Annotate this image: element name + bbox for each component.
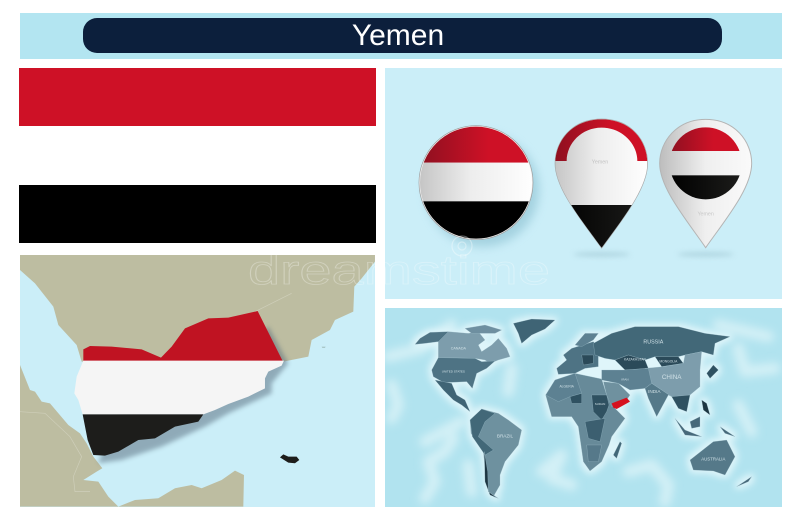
icon: flag pin marker: Yemen (592, 159, 608, 165)
icon: flag pin marker (553, 117, 650, 256)
Australia (690, 440, 735, 475)
North America (438, 332, 510, 363)
country labels (442, 339, 725, 462)
country labels: KAZAKHSTAN (624, 357, 647, 361)
continents (415, 319, 752, 498)
Yemen drop shadow (98, 327, 288, 463)
icon: location pin with flag disc (660, 119, 752, 256)
country labels: CHINA (662, 374, 682, 381)
Madagascar (613, 442, 622, 458)
panel: world map (385, 308, 782, 507)
country labels: RUSSIA (643, 339, 664, 345)
continent halo (415, 319, 752, 498)
country labels: MONGOLIA (659, 359, 678, 363)
New Zealand (737, 477, 752, 487)
Socotra island (280, 454, 299, 463)
ocean currents (388, 325, 775, 502)
Greenland (513, 319, 555, 343)
country labels: BRAZIL (497, 434, 514, 439)
country labels: INDIA (648, 389, 661, 394)
Yemen shape with flag (74, 311, 284, 456)
watermark (248, 235, 550, 293)
country labels: SUDAN (595, 402, 605, 406)
title pill: Yemen (352, 19, 444, 52)
country labels: CANADA (451, 346, 467, 350)
border lines (20, 293, 292, 492)
Africa (546, 373, 625, 471)
South America (470, 409, 522, 498)
title banner panel (20, 13, 782, 59)
Asia (593, 327, 730, 360)
Europe (557, 342, 598, 374)
watermark: dreamstime (248, 247, 550, 293)
title pill (83, 18, 722, 53)
Yemen highlighted (612, 398, 630, 409)
button shadow (426, 133, 539, 247)
country labels: UNITED STATES (442, 370, 465, 374)
country labels: ALGERIA (559, 385, 575, 389)
country labels: AUSTRALIA (701, 457, 725, 462)
country labels: IRAN (621, 377, 629, 381)
land masses (20, 255, 375, 507)
icon: location pin with flag disc: Yemen (697, 211, 714, 217)
panel: flag markers (385, 68, 782, 299)
icon: round flag button (418, 118, 752, 258)
panel: Yemen country map (20, 255, 375, 507)
large Yemen flag (19, 68, 376, 244)
